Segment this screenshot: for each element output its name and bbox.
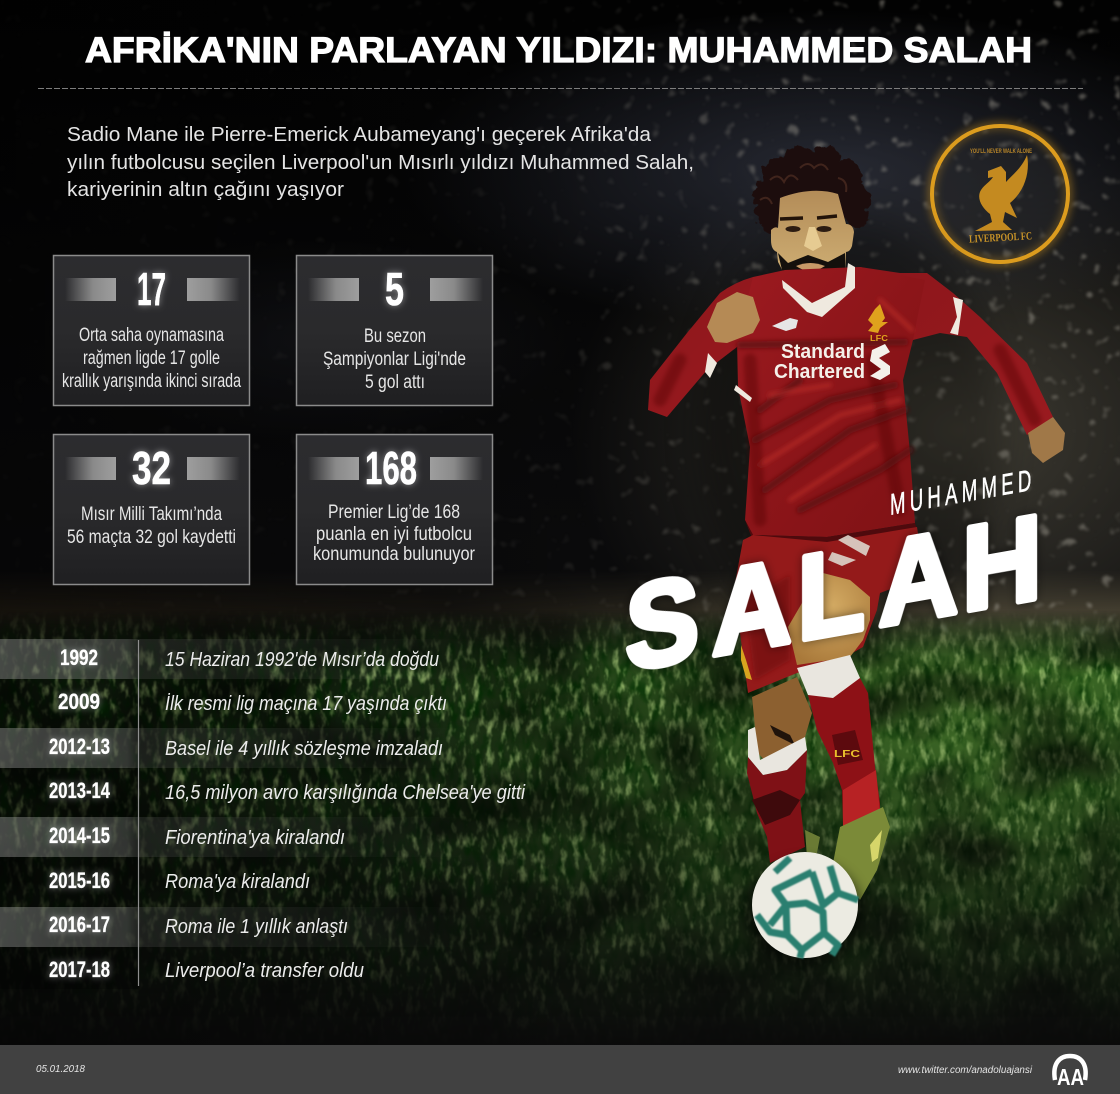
jersey collar xyxy=(782,263,855,317)
stat card: 17: 17 xyxy=(137,263,166,315)
player name: Salah: S xyxy=(625,549,699,697)
icon: Anadolu Agency logo xyxy=(1054,1056,1086,1090)
player right sleeve xyxy=(860,267,1053,435)
stat card: 17: Orta saha oynamasına xyxy=(79,325,224,346)
timeline xyxy=(0,639,525,989)
stat card: 5: 5 gol attı xyxy=(365,372,425,393)
thigh xyxy=(788,573,870,665)
icon: Liverpool FC badge: LIVERPOOL FC xyxy=(969,230,1032,246)
stat card: 168: 168 xyxy=(365,442,417,494)
right boot xyxy=(833,807,890,900)
right sock xyxy=(808,678,880,827)
timeline: 2015-16 xyxy=(49,868,110,893)
sponsor: Standard Chartered: Chartered xyxy=(774,361,865,383)
jersey hem xyxy=(745,520,917,545)
player name: Salah: H xyxy=(962,489,1042,637)
stat card: 32: 32 xyxy=(132,442,171,494)
left sock xyxy=(747,750,807,863)
player name: Salah: A xyxy=(878,504,958,652)
player name: Salah: A xyxy=(712,533,792,681)
sponsor: Standard Chartered xyxy=(774,341,890,383)
timeline: Roma ile 1 yıllık anlaştı xyxy=(165,916,348,938)
player: Muhammed Salah illustration xyxy=(648,146,1065,964)
intro text: yılın futbolcusu seçilen Liverpool'un Mısırlı yıldızı Muhammed Salah, xyxy=(67,151,694,174)
stat card: 17: rağmen ligde 17 golle xyxy=(83,348,220,369)
stat card: 168 xyxy=(296,434,492,584)
right sock label: LFC xyxy=(834,749,860,760)
left sock band xyxy=(748,727,807,775)
left knee and shin xyxy=(752,677,812,763)
timeline: 2012-13 xyxy=(49,734,110,759)
stat card: 5 xyxy=(296,256,492,406)
jersey brand mark xyxy=(772,318,798,331)
timeline: Basel ile 4 yıllık sözleşme imzaladı xyxy=(165,738,443,760)
sponsor: Standard Chartered: Standard xyxy=(781,341,865,363)
right hand xyxy=(1028,417,1065,463)
player shadow xyxy=(700,220,1000,640)
stat card: 168: konumunda bulunuyor xyxy=(313,544,476,565)
timeline: 2016-17 xyxy=(49,912,110,937)
timeline: İlk resmi lig maçına 17 yaşında çıktı xyxy=(165,693,447,715)
shorts crest xyxy=(741,645,752,680)
stat card: 32: 56 maçta 32 gol kaydetti xyxy=(67,527,236,548)
timeline: 1992 xyxy=(60,645,98,670)
icon: Liverpool FC badge: YOU'LL NEVER WALK ALONE xyxy=(970,149,1032,155)
timeline: 2009 xyxy=(58,689,100,714)
shorts xyxy=(735,527,920,693)
player left sleeve xyxy=(648,277,760,417)
left hand xyxy=(707,292,760,343)
icon: Anadolu Agency logo: AA xyxy=(1057,1064,1084,1090)
footer bar: 05.01.2018 xyxy=(36,1064,85,1075)
stat card: 168: Premier Lig’de 168 xyxy=(328,502,460,523)
footer bar xyxy=(0,1045,1120,1094)
sleeve cuffs xyxy=(705,297,963,402)
stat card: 32: Mısır Milli Takımı’nda xyxy=(81,504,222,525)
right sock band xyxy=(797,655,860,698)
footer bar: www.twitter.com/anadoluajansi xyxy=(898,1065,1033,1076)
player name: Muhammed: MUHAMMED xyxy=(890,464,1031,522)
hair curls xyxy=(760,164,846,204)
timeline: Liverpool’a transfer oldu xyxy=(165,960,364,982)
timeline: 2013-14 xyxy=(49,778,111,803)
intro text: Sadio Mane ile Pierre-Emerick Aubameyang'ı geçerek Afrika'da xyxy=(67,123,652,146)
back boot xyxy=(805,830,820,857)
player torso jersey xyxy=(737,267,925,537)
timeline: 2017-18 xyxy=(49,957,110,982)
title: AFRİKA'NIN PARLAYAN YILDIZI: MUHAMMED SALAH xyxy=(85,30,1032,70)
player name: Salah: L xyxy=(797,520,865,666)
timeline: 16,5 milyon avro karşılığında Chelsea'ye gitti xyxy=(165,782,525,804)
stat card: 5: 5 xyxy=(385,263,404,315)
jersey crest: LFC xyxy=(870,334,888,343)
intro text xyxy=(67,123,694,201)
player hair xyxy=(753,146,871,239)
timeline: 15 Haziran 1992'de Mısır’da doğdu xyxy=(165,649,439,671)
timeline: Roma'ya kiralandı xyxy=(165,871,310,893)
icon: Liverpool FC badge xyxy=(932,126,1068,262)
stat card: 5: Bu sezon xyxy=(364,326,426,347)
stat card: 17: krallık yarışında ikinci sırada xyxy=(62,371,241,392)
stat card: 168: puanla en iyi futbolcu xyxy=(316,524,472,545)
timeline: 2014-15 xyxy=(49,823,110,848)
player face xyxy=(771,191,854,300)
stat card: 17 xyxy=(54,256,250,406)
jersey folds xyxy=(660,300,1035,520)
stat card: 5: Şampiyonlar Ligi'nde xyxy=(323,349,466,370)
stat card: 32 xyxy=(54,434,250,584)
football xyxy=(747,852,863,964)
jersey crest xyxy=(868,304,888,343)
timeline: Fiorentina'ya kiralandı xyxy=(165,827,345,849)
intro text: kariyerinin altın çağını yaşıyor xyxy=(67,178,344,201)
